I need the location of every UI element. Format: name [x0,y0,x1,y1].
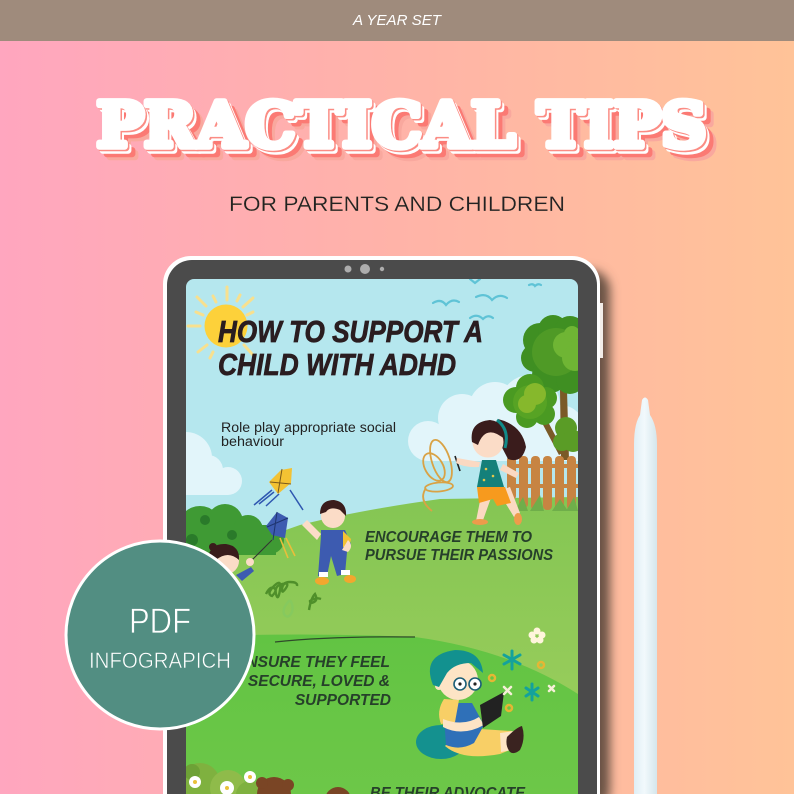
bushes left [178,504,284,555]
illustration: boy reading [416,650,524,759]
text: encourage: ENCOURAGE THEM TO [365,529,532,546]
birds [433,279,541,319]
sparkles [489,651,554,711]
illustration: girl with ribbon [419,419,526,525]
icon: flower [528,628,546,644]
text: role play [222,422,396,446]
text: encourage: PURSUE THEIR PASSIONS [365,547,554,564]
fence [507,456,578,510]
title: PRACTICAL TIPS [98,90,708,163]
badge: PDF infographic [66,541,254,729]
heading: HOW TO SUPPORT A [218,314,483,349]
text: ensure [248,656,390,705]
stylus pencil [634,398,657,794]
title: PRACTICAL TIPS [96,88,706,162]
badge: PDF infographic: PDF [129,602,191,641]
text: encourage [365,531,553,560]
subtitle: FOR PARENTS AND CHILDREN [229,193,565,216]
tablet device [163,256,600,794]
green ribbons [266,582,321,617]
text: role play: Role play appropriate social [221,420,396,435]
title: PRACTICAL TIPS [107,99,717,172]
bottom left bush [186,763,258,794]
tablet screen illustration [160,279,588,794]
text: ensure: SECURE, LOVED & [248,673,390,690]
text: ensure: SUPPORTED [295,692,391,709]
children at bottom [256,777,351,794]
grass tufts [515,495,578,511]
tablet side button [600,303,603,358]
ground upper [232,497,578,694]
heading: CHILD WITH ADHD [218,347,456,382]
top banner [0,0,794,41]
top banner: A YEAR SET [352,13,442,29]
illustration: small girl [208,543,254,581]
clouds [160,375,585,495]
badge: PDF infographic: INFOGRAPICH [89,648,231,673]
text: ensure: ENSURE THEY FEEL [236,654,390,671]
illustration: kites [250,468,303,562]
text: role play: behaviour [221,434,285,449]
title: PRACTICAL TIPS [100,92,710,166]
ground lower [186,634,578,794]
illustration: boy with kite [302,500,356,585]
tablet shadow [570,270,610,794]
heading [218,320,482,376]
tree [503,315,578,460]
camera dots [344,264,384,274]
title: PRACTICAL TIPS [104,96,714,169]
icon: sun [188,287,253,358]
